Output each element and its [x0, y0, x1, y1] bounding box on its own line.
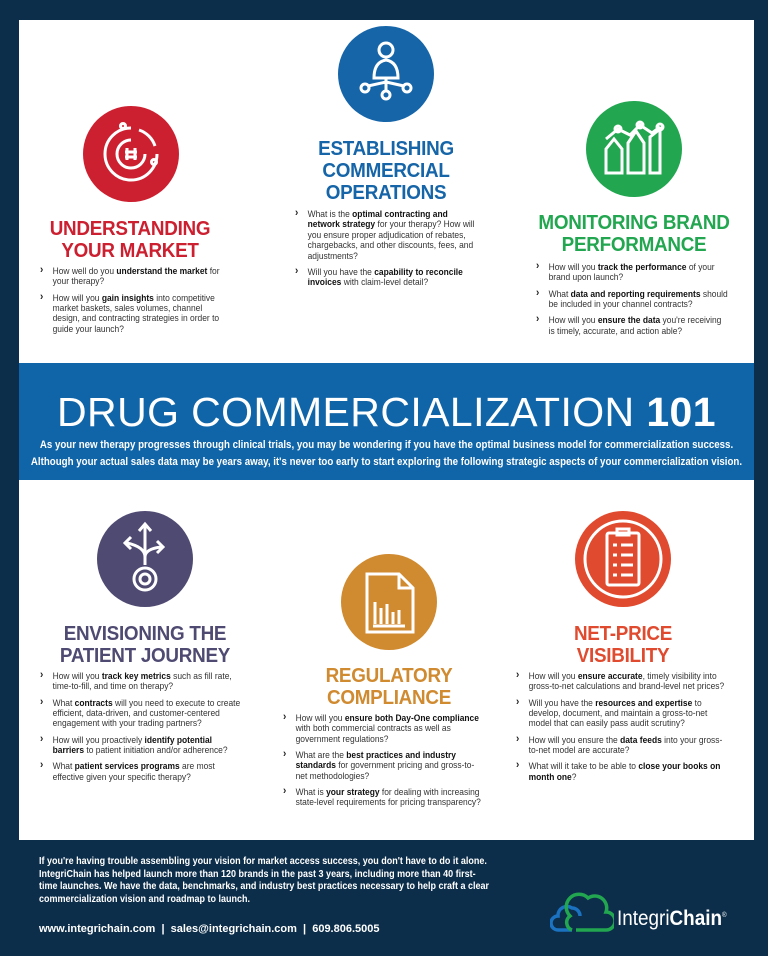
text: intro: Although your actual sales data may be years away, it's never too early to start exploring the following strategic aspects of your commercialization vision.: [31, 456, 742, 468]
text: regulatory bullets: What are the best practices and industry standards for government pricing and gross-to-net methodologies?: [296, 749, 474, 781]
text: commercial operations bullets: What is the optimal contracting and network strategy for your therapy? How will you ensure proper adjudication of rebates, chargebacks, and other discounts, fees, and adjustments?: [308, 208, 475, 261]
footer text: [39, 856, 489, 905]
text: regulatory bullets: [283, 712, 481, 807]
icon: purple journey circle: [97, 511, 193, 607]
text: commercial operations bullets: Will you have the capability to reconcile invoices with claim-level detail?: [308, 266, 463, 287]
text: net-price bullets: How will you ensure accurate, timely visibility into gross-to-net calculations and brand-level net prices?: [529, 670, 724, 691]
heading: understanding your market: YOUR MARKET: [61, 239, 199, 262]
heading: understanding your market: [50, 217, 210, 262]
icon: orange document circle: [341, 554, 437, 650]
icon: blue network circle: [338, 26, 434, 122]
heading: establishing commercial operations: ESTABLISHING: [318, 137, 454, 160]
heading: net-price visibility: NET-PRICE: [574, 622, 672, 645]
heading: envisioning the patient journey: ENVISIONING THE: [64, 622, 226, 645]
heading: understanding your market: UNDERSTANDING: [50, 217, 210, 240]
text: market bullets: [40, 265, 220, 334]
footer contact: www.integrichain.com | sales@integrichain.com | 609.806.5005: [39, 923, 380, 935]
icon: red market circle: [83, 106, 179, 202]
text: journey bullets: [40, 670, 240, 782]
text: net-price bullets: [516, 670, 724, 782]
icon: red-orange clipboard circle: [575, 511, 671, 607]
text: net-price bullets: Will you have the resources and expertise to develop, document, and maintain a gross-to-net model that can easily pass audit scrutiny?: [529, 697, 707, 728]
heading: establishing commercial operations: OPERATIONS: [326, 181, 446, 204]
text: monitoring bullets: What data and reporting requirements should be included in your channel contracts?: [549, 288, 728, 309]
text: market bullets: How will you gain insights into competitive market baskets, sales volumes, channel design, and contracting strategies in order to guide your launch?: [53, 292, 219, 334]
footer text: time launches. We have the data, benchmarks, and industry best practices necessary to help craft a clear: [39, 881, 489, 892]
text: commercial operations bullets: [295, 208, 475, 287]
text: net-price bullets: What will it take to be able to close your books on month one?: [529, 760, 720, 782]
text: market bullets: How well do you understand the market for your therapy?: [53, 265, 220, 286]
heading: establishing commercial operations: COMMERCIAL: [322, 159, 450, 182]
text: intro: [31, 439, 742, 468]
heading: monitoring brand performance: PERFORMANCE: [562, 233, 706, 256]
heading: envisioning the patient journey: PATIENT JOURNEY: [60, 644, 230, 667]
text: net-price bullets: How will you ensure the data feeds into your gross-to-net model are accurate?: [529, 734, 722, 755]
title: DRUG COMMERCIALIZATION 101: [57, 389, 716, 435]
heading: envisioning the patient journey: [60, 622, 230, 667]
text: intro: As your new therapy progresses through clinical trials, you may be wondering if you have the optimal business model for commercialization success.: [40, 439, 733, 451]
text: journey bullets: What contracts will you need to execute to create efficient, data-driven, and customer-centered engagement with your trading partners?: [53, 697, 240, 728]
logo: integrichain: [550, 892, 727, 932]
text: journey bullets: How will you track key metrics such as fill rate, time-to-fill, and time on therapy?: [53, 670, 232, 691]
heading: regulatory compliance: COMPLIANCE: [327, 686, 451, 709]
text: regulatory bullets: What is your strategy for dealing with increasing state-level requirements for pricing transparency?: [296, 786, 481, 807]
heading: monitoring brand performance: MONITORING BRAND: [538, 211, 730, 234]
heading: net-price visibility: [574, 622, 672, 667]
banner: drug commercialization 101: [19, 363, 754, 480]
text: journey bullets: What patient services programs are most effective given your specific therapy?: [53, 760, 215, 782]
footer text: If you're having trouble assembling your vision for market access success, you don't have to do it alone.: [39, 856, 487, 867]
text: monitoring bullets: How will you track the performance of your brand upon launch?: [549, 261, 715, 282]
heading: net-price visibility: VISIBILITY: [577, 644, 669, 667]
heading: regulatory compliance: REGULATORY: [326, 664, 452, 687]
text: regulatory bullets: How will you ensure both Day-One compliance with both commercial contracts as well as government regulations?: [296, 712, 479, 744]
text: journey bullets: How will you proactively identify potential barriers to patient initiation and/or adherence?: [53, 734, 228, 755]
heading: regulatory compliance: [326, 664, 452, 709]
icon: green chart circle: [586, 101, 682, 197]
logo: integrichain: IntegriChain®: [617, 907, 727, 930]
heading: monitoring brand performance: [538, 211, 730, 256]
footer text: IntegriChain has helped launch more than 120 brands in the past 3 years, including more than 40 first-: [39, 869, 476, 880]
heading: establishing commercial operations: [318, 137, 454, 204]
text: monitoring bullets: [536, 261, 728, 336]
footer text: commercialization vision and roadmap to launch.: [39, 894, 250, 905]
text: monitoring bullets: How will you ensure the data you're receiving is timely, accurate, and action able?: [549, 314, 721, 336]
